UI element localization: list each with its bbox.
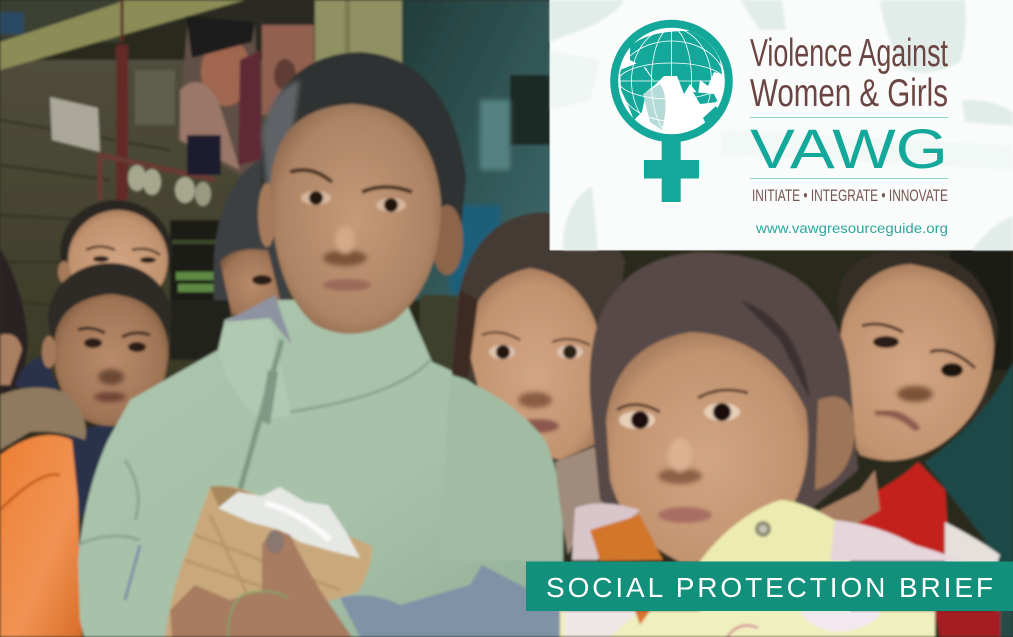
child: central boy's head <box>258 52 466 334</box>
child: back boy centre <box>213 158 290 320</box>
poster with woman and child <box>178 18 260 175</box>
scarf of girl behind <box>555 440 625 555</box>
banner: Social Protection Brief: SOCIAL PROTECTION BRIEF <box>546 572 993 603</box>
dark teal jacket on right <box>925 362 1013 637</box>
window slats <box>170 220 220 300</box>
green coat of central boy <box>78 295 563 637</box>
blue grey sleeve <box>340 565 563 637</box>
red rope <box>120 0 124 42</box>
faint world map <box>550 0 1013 250</box>
child: back boy upper left <box>58 200 172 310</box>
red jacket and white fur collar <box>850 462 1013 637</box>
child: boy on the right <box>830 250 998 461</box>
sign <box>50 97 100 152</box>
icon: venus symbol with globe <box>614 24 729 202</box>
orange jacket with fur hood <box>0 388 86 637</box>
dark jacket behind children <box>15 355 130 525</box>
website: www.vawgresourceguide.org <box>755 220 948 236</box>
globe land masses <box>620 31 722 128</box>
title: Violence Against Women & Girls <box>750 32 948 115</box>
green coat shoulder over girl <box>440 375 563 560</box>
child: girl behind <box>452 212 625 460</box>
hand holding basket <box>170 530 352 637</box>
child: girl at left edge <box>0 248 28 395</box>
title: Violence Against Women & Girls: Women & Girls <box>750 72 948 115</box>
banner: Social Protection Brief <box>526 562 1013 611</box>
yellow fleece jacket <box>560 500 960 637</box>
rice basket with plastic bag <box>165 486 372 637</box>
logo panel <box>550 0 1013 250</box>
child: main girl <box>589 252 880 562</box>
child: boy lower left <box>42 263 172 426</box>
hanging hearts <box>128 165 146 191</box>
pink and orange collar of main girl <box>572 503 663 561</box>
wordmark: VAWG: VAWG <box>750 117 948 180</box>
